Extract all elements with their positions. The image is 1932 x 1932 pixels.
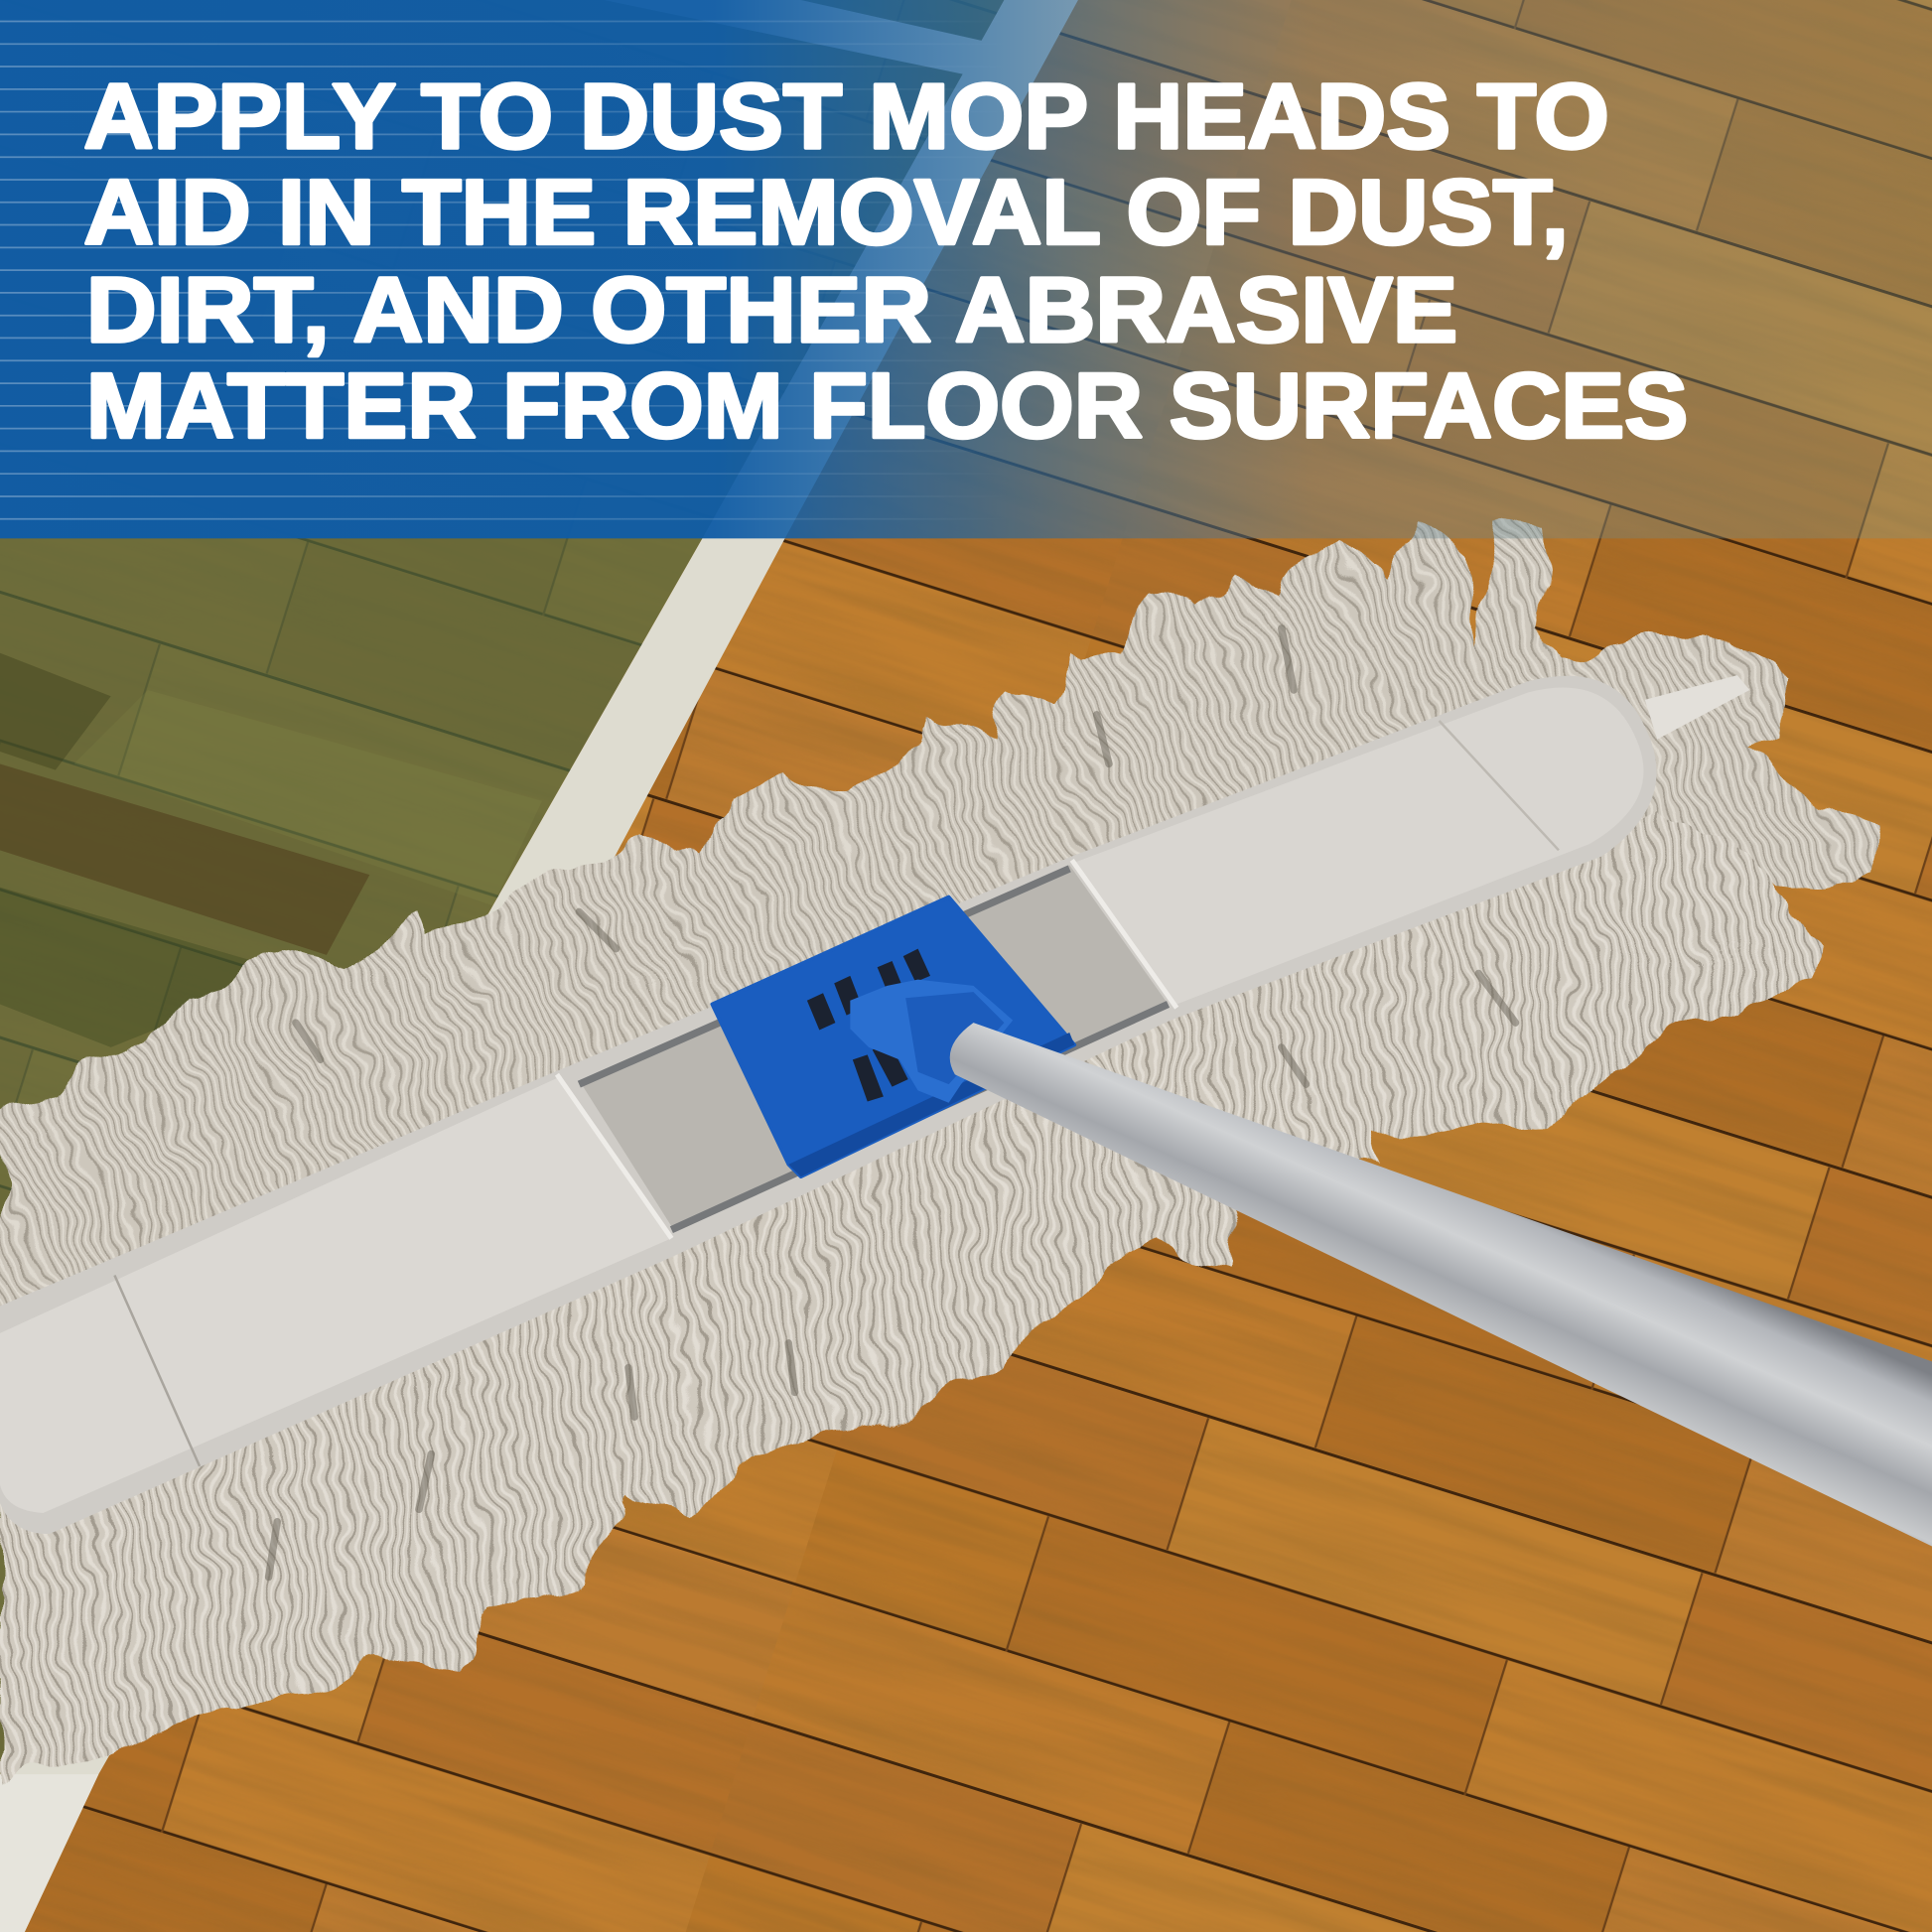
- left pad panel: [0, 1078, 671, 1513]
- pad end tag: [1645, 675, 1749, 740]
- bottom-left floor corner accent: [0, 1774, 98, 1932]
- headline line 1: APPLY TO DUST MOP HEADS TO: [83, 65, 1609, 168]
- mop fringe: lower strands: [0, 801, 1830, 1780]
- right pad seam: [1440, 721, 1559, 850]
- frame slots: [807, 949, 930, 1102]
- headline line 3: DIRT, AND OTHER ABRASIVE: [86, 258, 1457, 361]
- headline: [83, 65, 1688, 458]
- right pad panel: [1074, 688, 1643, 1004]
- blue plastic mop frame: [712, 897, 1074, 1176]
- mop handle pole: [950, 1023, 1932, 1547]
- blue header banner: [0, 0, 1932, 538]
- fringe shadow gaps: [269, 628, 1516, 1578]
- headline line 2: AID IN THE REMOVAL OF DUST,: [83, 161, 1569, 264]
- swivel connector: [850, 980, 1013, 1103]
- middle exposed pad section: [582, 865, 1169, 1232]
- left pad seam: [114, 1276, 200, 1466]
- green painted floor section: [0, 0, 1004, 1774]
- header stripes: [0, 21, 1011, 519]
- upper court line branch: [604, 0, 1023, 78]
- white court line: [0, 0, 1078, 1932]
- cloth pad: [0, 676, 1657, 1534]
- metal rails: [579, 869, 1169, 1230]
- pad seam stitching: [557, 860, 1176, 1238]
- mop fringe: upper strands: [0, 517, 1885, 1453]
- dust mop: [0, 517, 1932, 1780]
- headline line 4: MATTER FROM FLOOR SURFACES: [86, 354, 1688, 458]
